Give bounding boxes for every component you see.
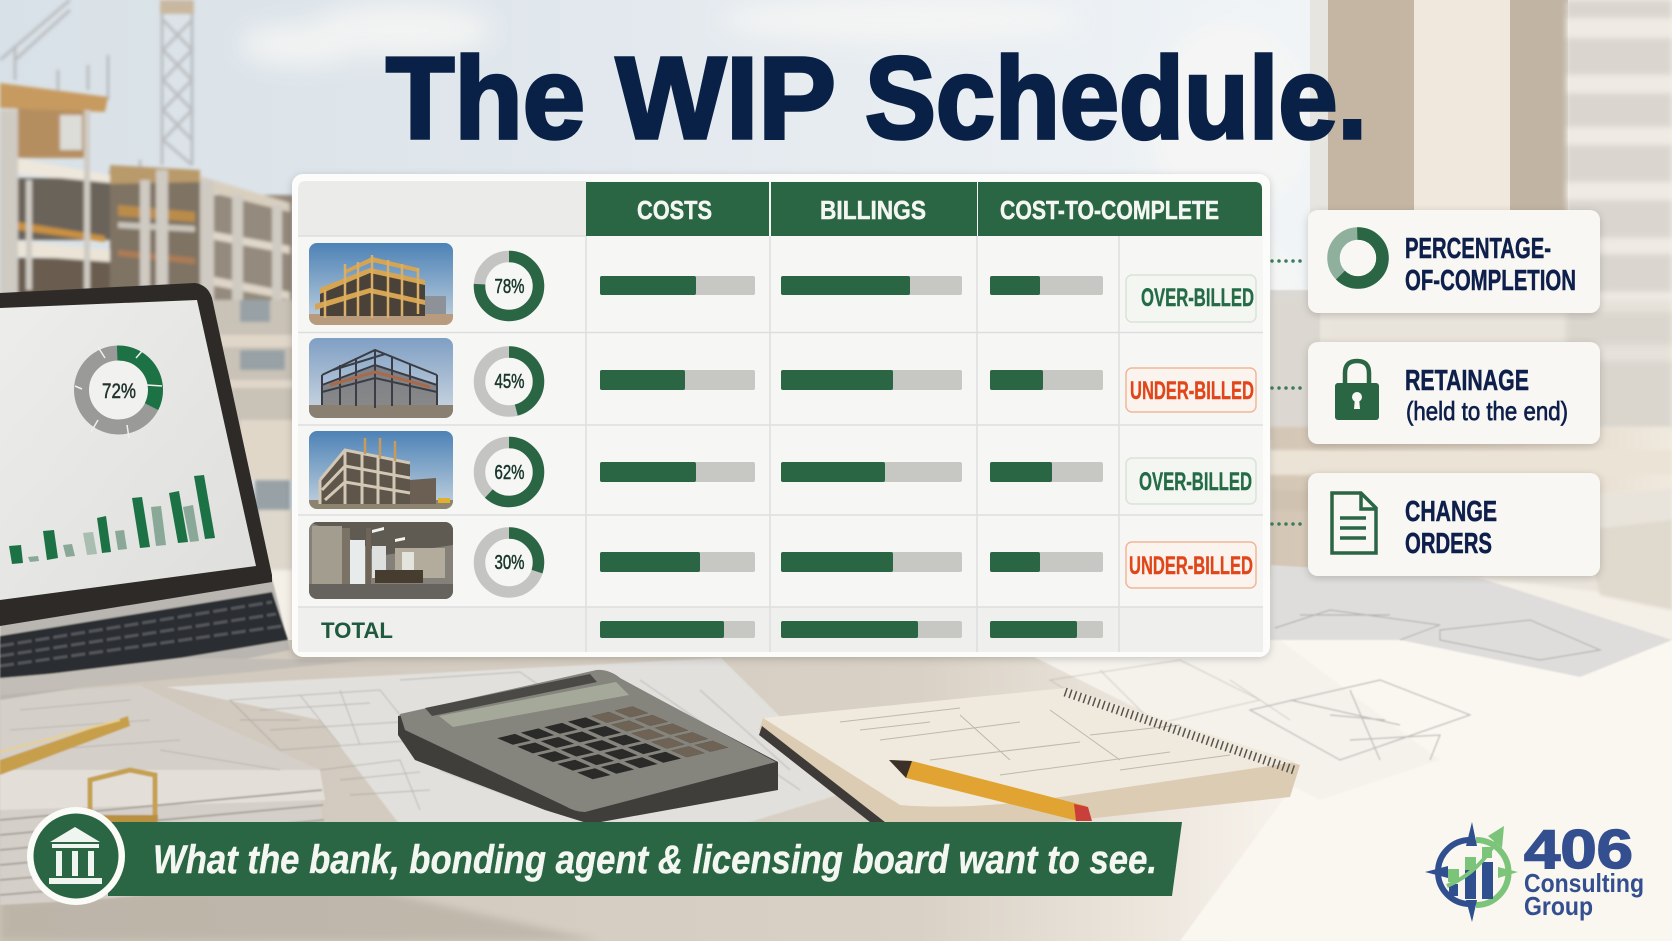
spiral notebook with pencil bbox=[759, 688, 1300, 826]
calculator keys bbox=[505, 708, 726, 776]
building and crane, blurred bbox=[0, 0, 295, 570]
card: percentage-of-completion: OF-COMPLETION bbox=[1405, 265, 1576, 297]
row 2: status badge bbox=[1126, 368, 1256, 412]
title: The bbox=[386, 33, 585, 163]
row 3: bars bbox=[600, 462, 1103, 482]
desk bbox=[0, 640, 1672, 941]
laptop donut: 72% bbox=[75, 347, 162, 438]
icon: donut bbox=[1334, 234, 1382, 282]
laptop screen bbox=[0, 283, 272, 626]
title: Schedule. bbox=[865, 33, 1367, 163]
total row: TOTAL bbox=[321, 618, 393, 643]
logo: 406 Consulting Group: Consulting bbox=[1524, 868, 1644, 898]
row 1: bars bbox=[600, 276, 1103, 295]
title: WIP bbox=[616, 33, 836, 163]
card: change orders: CHANGE bbox=[1405, 496, 1497, 528]
row 3: percent-complete donut bbox=[480, 442, 538, 502]
logo: 406 Consulting Group bbox=[1425, 818, 1644, 922]
row 4: status badge bbox=[1126, 542, 1256, 588]
calculator bbox=[398, 670, 778, 824]
table header row: BILLINGS bbox=[820, 195, 926, 225]
logo mark bbox=[1425, 822, 1518, 922]
row 1: job photo, timber frame bbox=[309, 243, 453, 325]
row 2: bars bbox=[600, 370, 1103, 390]
table header row: COST-TO-COMPLETE bbox=[1000, 195, 1219, 225]
row 4: job photo, building interior bbox=[309, 522, 453, 599]
paper stack with clip and pen bbox=[0, 685, 325, 905]
card: retainage: (held to the end) bbox=[1406, 396, 1568, 426]
panel: WIP schedule table bbox=[292, 174, 1270, 657]
card: retainage bbox=[1308, 342, 1600, 444]
card: retainage: RETAINAGE bbox=[1405, 365, 1529, 397]
laptop base and keyboard bbox=[0, 578, 365, 700]
row 4: percent-complete donut: 30% bbox=[494, 552, 525, 574]
total row bbox=[321, 618, 1103, 643]
laptop bar chart bbox=[9, 475, 215, 564]
row 3: status badge: OVER-BILLED bbox=[1139, 468, 1252, 496]
card: percentage-of-completion: PERCENTAGE- bbox=[1405, 233, 1551, 265]
table header row bbox=[586, 182, 1262, 236]
row 4: percent-complete donut bbox=[480, 533, 538, 592]
row 2: status badge: UNDER-BILLED bbox=[1130, 377, 1254, 405]
table header row: COSTS bbox=[637, 195, 712, 225]
icon: padlock bbox=[1335, 361, 1379, 420]
card: change orders bbox=[1308, 473, 1600, 576]
calculator display bbox=[439, 682, 629, 727]
row 1: percent-complete donut bbox=[480, 256, 538, 316]
logo: 406 Consulting Group: Group bbox=[1524, 891, 1593, 921]
pencil bbox=[889, 760, 1092, 821]
logo: 406 Consulting Group: 406 bbox=[1524, 818, 1633, 880]
row 1: status badge bbox=[1126, 275, 1256, 322]
icon: bank badge bbox=[27, 807, 125, 905]
laptop with dashboard bbox=[0, 283, 365, 700]
row 2: percent-complete donut bbox=[480, 352, 538, 411]
row 3: percent-complete donut: 62% bbox=[494, 462, 525, 484]
row 2: job photo, steel frame bbox=[309, 338, 453, 418]
row 4: bars bbox=[600, 552, 1103, 572]
row 3: status badge bbox=[1126, 458, 1256, 504]
bottom banner bbox=[108, 822, 1182, 896]
dotted connectors bbox=[1272, 261, 1307, 524]
card: percentage-of-completion bbox=[1308, 210, 1600, 313]
laptop donut: 72%: 72% bbox=[102, 380, 136, 403]
blueprints on desk bbox=[166, 565, 1672, 941]
icon: document bbox=[1332, 493, 1376, 553]
bottom banner: What the bank, bonding agent & licensing board want to see. bbox=[153, 838, 1157, 882]
building B bbox=[110, 182, 205, 312]
row 3: job photo, concrete building bbox=[309, 431, 453, 509]
row 4: status badge: UNDER-BILLED bbox=[1129, 552, 1253, 580]
card: change orders: ORDERS bbox=[1405, 528, 1492, 560]
window frames on the right bbox=[1270, 0, 1672, 610]
row 2: percent-complete donut: 45% bbox=[494, 371, 525, 393]
row 1: status badge: OVER-BILLED bbox=[1141, 284, 1254, 312]
row 1: percent-complete donut: 78% bbox=[494, 276, 525, 298]
tower A bbox=[18, 108, 88, 158]
title bbox=[386, 33, 1367, 163]
